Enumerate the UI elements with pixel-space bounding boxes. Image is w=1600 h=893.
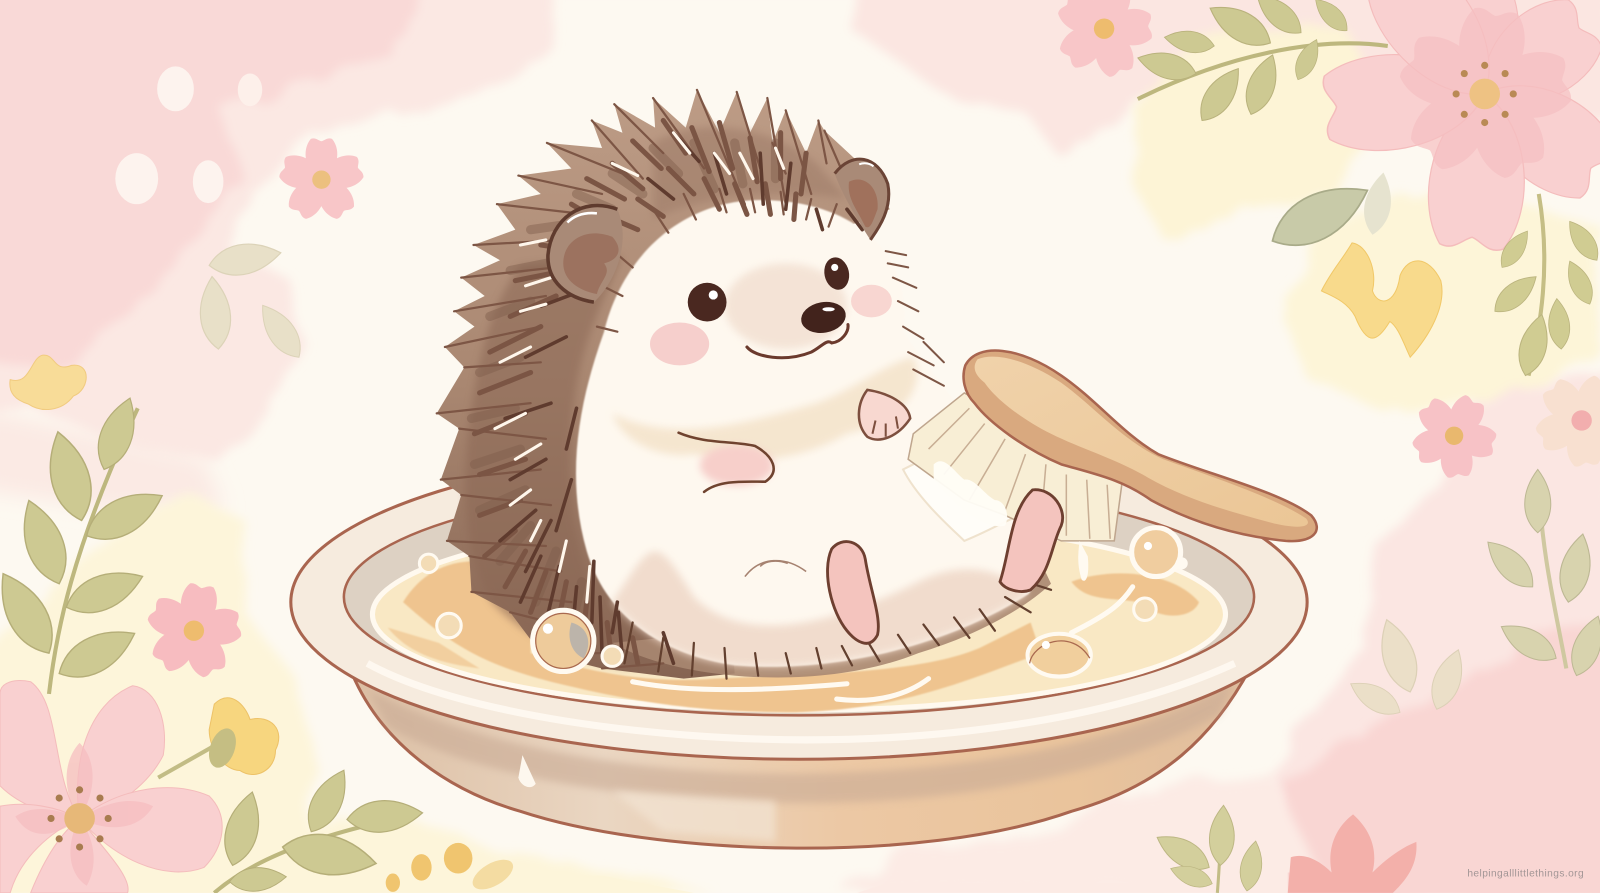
brush: bristles (908, 393, 1122, 541)
hedgehog: left cheek (650, 323, 709, 365)
hedgehog: left arm (679, 433, 774, 492)
sprig: bottom right small (1151, 805, 1266, 893)
brush: top face (975, 357, 1308, 527)
bubble: front right (1028, 634, 1091, 677)
leaves: faint lower right (1345, 615, 1471, 722)
bubble: large left (533, 610, 594, 672)
hedgehog: left eye (688, 283, 727, 322)
wash: bottom right pink (1245, 362, 1600, 893)
sprig: top right (1135, 0, 1388, 128)
small flower: left (137, 576, 251, 687)
flower: top right large pink (1321, 0, 1600, 252)
hedgehog: bottom fringe strokes (624, 582, 1051, 679)
hedgehog: darker quill shading left (465, 255, 633, 668)
hedgehog: lower body shading (612, 552, 1029, 667)
sprig: bottom left (214, 764, 424, 893)
hedgehog: darker quill shading top (653, 127, 847, 219)
hedgehog: tummy tuft (745, 561, 806, 577)
hedgehog: quills deep brown dashes (500, 133, 862, 663)
yellow flower: lower left (158, 698, 279, 778)
hedgehog: bowl-side bottom fringe (612, 551, 1051, 678)
hedgehog: quills strokes light outline (437, 90, 852, 668)
watermark: helpingalllittlethings.org (1467, 869, 1584, 880)
bowl: drip (518, 755, 536, 787)
hedgehog: right ear (835, 159, 889, 240)
hedgehog: soap suds (903, 454, 1020, 541)
paper holes in top left wash (157, 66, 194, 111)
hedgehog: right cheek (851, 285, 892, 317)
wash: right yellow (1281, 184, 1600, 413)
wash: left lower pale pink (0, 408, 224, 510)
hedgehog: quill mass (437, 90, 890, 679)
hedgehog: right fringe quills (886, 251, 944, 386)
brush: soap lumps (934, 461, 1007, 526)
wash: bottom left yellow (0, 495, 714, 893)
sprig: lower right (1479, 469, 1600, 680)
hedgehog: quills white highlights (495, 133, 784, 602)
wash: top right pink (852, 0, 1600, 158)
bubble: small cluster (419, 554, 1156, 666)
hedgehog: right paw (859, 390, 910, 440)
wash: top left pink (0, 0, 556, 461)
wash: bottom centre pink (842, 776, 1327, 893)
wash: top left deeper pink (0, 0, 423, 373)
small flower: top centre right (1042, 0, 1165, 89)
foot back: pink foot against the brush (1000, 490, 1088, 591)
hedgehog: nose (799, 298, 848, 336)
wash: top right yellow (1133, 31, 1378, 240)
yellow blossom: right (1321, 243, 1442, 357)
hedgehog: chest shading (612, 357, 917, 460)
sprig: right (1488, 194, 1600, 379)
hedgehog: quill mass lens marks (471, 143, 776, 628)
sprig: left tall (0, 393, 170, 694)
bowl: inner wall (344, 479, 1254, 715)
brush: back of head and handle (964, 351, 1317, 541)
bowl (291, 445, 1307, 848)
wash: bottom edge strips (0, 873, 1600, 893)
hedgehog: foot front (828, 542, 878, 643)
brush (908, 351, 1317, 541)
small flower: right (1394, 378, 1513, 495)
bubble: back right (1132, 528, 1188, 577)
buds: bottom centre left (386, 843, 518, 893)
bowl: outer body (352, 668, 1250, 848)
leaf: grey green right (1262, 170, 1396, 260)
hedgehog: left ear (548, 206, 623, 302)
brush: bristle lines (929, 408, 1110, 539)
bowl: white foam lines (633, 587, 1133, 700)
flower: bottom right deep pink (1288, 814, 1417, 893)
bowl: water caramel swirls (388, 561, 1199, 712)
bowl: shadow under rim (367, 682, 1235, 803)
hedgehog: mouth (747, 325, 848, 358)
sprig: upper left faint (197, 238, 310, 365)
hedgehog: muzzle shading (724, 263, 847, 349)
hedgehog: body (576, 200, 1039, 667)
hedgehog (437, 90, 1051, 679)
bowl: rim (291, 445, 1307, 759)
yellow flower: left (10, 355, 86, 410)
hedgehog: quills dark dashes (474, 120, 806, 663)
bowl: highlight patch (612, 791, 776, 842)
flower: bottom left large pink (0, 681, 222, 893)
wash: bottom right deeper pink (1276, 623, 1600, 893)
hedgehog: right eye (821, 255, 852, 292)
small flower: top left (277, 138, 366, 222)
small flower: far right pale (1516, 357, 1600, 485)
bowl: water (372, 518, 1226, 710)
bubbles (419, 528, 1188, 677)
bowl: rim highlight (367, 663, 1235, 740)
